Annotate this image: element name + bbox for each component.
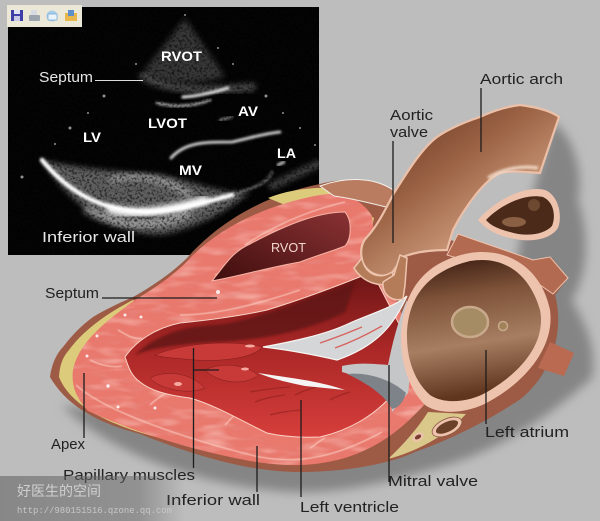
label: Left ventricle: Left ventricle — [300, 500, 399, 516]
label: Aortic valve — [390, 108, 433, 243]
toolbar — [7, 5, 82, 27]
left ventricle lower trabeculae — [250, 322, 350, 415]
label: Mitral valve: Mitral valve — [388, 474, 478, 490]
watermark: 好医生的空间 — [17, 483, 101, 499]
myocardium marbled texture — [74, 194, 424, 465]
label: AV: AV — [238, 103, 259, 119]
ultrasound: bright echo cores — [42, 88, 284, 212]
dark shadow in left ventricle — [135, 282, 355, 355]
label: Papillary muscles — [63, 348, 219, 484]
myocardium fibres — [76, 202, 382, 460]
myocardium — [73, 194, 424, 465]
fossa ovalis — [452, 307, 508, 337]
label: Left atrium: Left atrium — [485, 425, 569, 441]
aortic arch — [361, 105, 559, 276]
ultrasound: atrial wall echoes — [222, 164, 318, 197]
aortic valve cusps — [354, 255, 407, 300]
label: Apex — [51, 373, 86, 453]
yellow epicardial fat: apex — [59, 300, 160, 438]
ultrasound: RVOT sector speckle — [143, 18, 225, 82]
label: Inferior wall — [166, 446, 260, 509]
ultrasound echoes — [38, 18, 319, 238]
papillary muscles — [150, 343, 262, 391]
icon: mail — [46, 10, 58, 22]
icon: folder — [65, 10, 77, 21]
label: Aortic arch — [480, 72, 563, 152]
label: MV: MV — [179, 162, 203, 178]
label: Aortic valve: valve — [390, 125, 428, 141]
cavity: left ventricle — [125, 272, 410, 437]
label: RVOT on heart: RVOT — [271, 240, 306, 255]
yellow epicardial fat: top — [268, 188, 374, 228]
watermark — [0, 476, 185, 521]
icon: save — [11, 10, 23, 21]
left atrium chamber — [407, 260, 541, 401]
label: Mitral valve — [388, 365, 478, 490]
label: Apex: Apex — [51, 437, 86, 453]
pulmonary branch — [447, 234, 568, 294]
label: Septum: Septum — [45, 286, 99, 302]
label: LVOT: LVOT — [148, 115, 187, 131]
label: Papillary muscles: Papillary muscles — [63, 468, 195, 484]
coronary vessels — [411, 413, 465, 443]
aortic arch highlight — [488, 167, 538, 178]
ultrasound: septum echoes — [143, 76, 252, 120]
panel: ultrasound image — [8, 7, 319, 255]
label: Left atrium — [485, 350, 569, 441]
ultrasound: scattered depth markers — [20, 14, 316, 178]
ultrasound: inferior wall haze — [42, 160, 250, 234]
cavity: RVOT — [212, 212, 350, 281]
watermark: http://980151516.qzone.qq.com — [17, 506, 172, 516]
papillary highlights — [174, 344, 255, 386]
icon: print — [29, 10, 40, 21]
label: Aortic valve: Aortic — [390, 108, 433, 124]
heart shadow — [62, 122, 593, 492]
mitral valve chordae and leaflet — [258, 296, 410, 412]
label: LV: LV — [83, 129, 102, 145]
pulmonary vein — [538, 342, 574, 376]
ultrasound: speckle grain — [44, 20, 319, 238]
heart outer rim — [50, 180, 568, 472]
label: Inferior wall: Inferior wall — [42, 230, 135, 246]
label: RVOT: RVOT — [161, 48, 202, 64]
label: LA: LA — [277, 145, 296, 161]
yellow epicardial fat: base — [388, 412, 466, 459]
top fold of heart — [320, 180, 396, 207]
label: Aortic arch: Aortic arch — [480, 72, 563, 88]
left atrium wall — [401, 252, 551, 412]
leaders and labels — [45, 72, 569, 516]
label: Left ventricle — [300, 400, 399, 516]
label: Septum with leader: Septum — [39, 70, 93, 86]
white speckles — [86, 290, 220, 410]
label: Inferior wall: Inferior wall — [166, 493, 260, 509]
aortic vessel branch — [478, 189, 560, 240]
label: Septum with leader — [39, 70, 143, 86]
